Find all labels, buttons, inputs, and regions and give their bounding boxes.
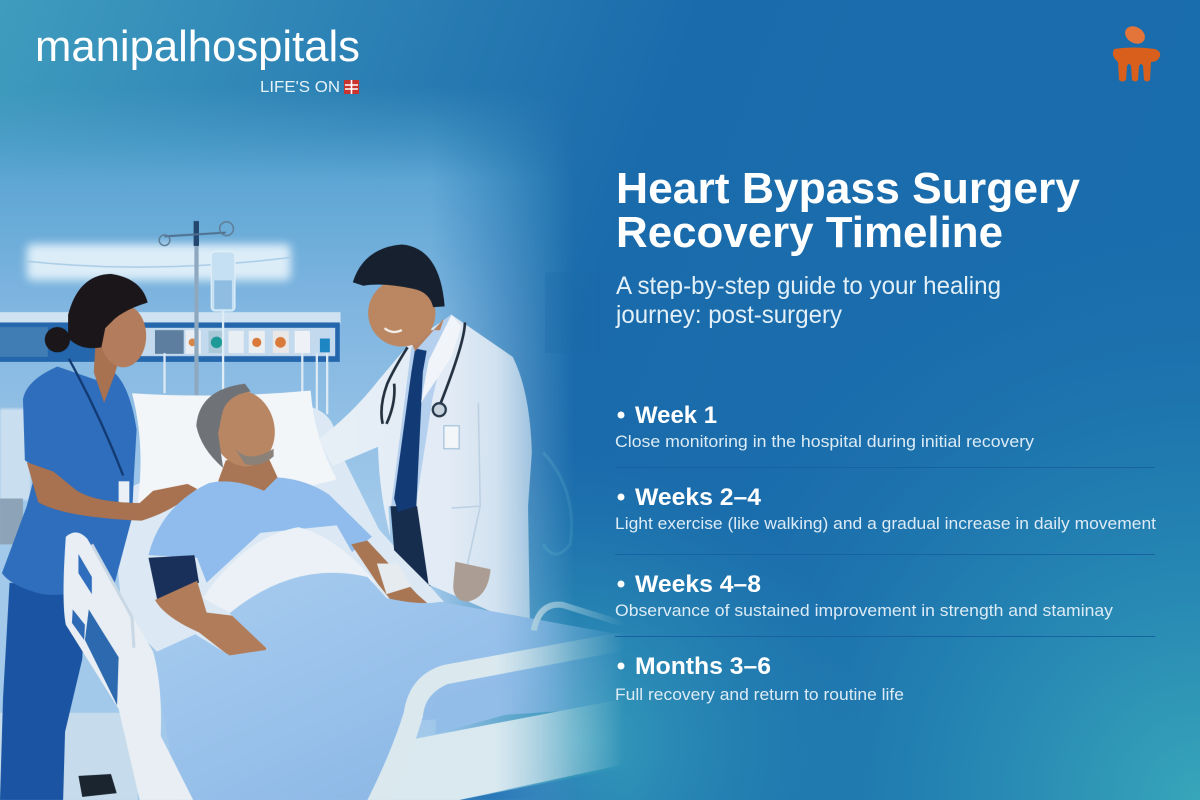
ceiling light (27, 244, 291, 280)
subtitle (615, 272, 1001, 329)
arm (155, 581, 268, 656)
timeline item: week 1: Close monitoring in the hospital during initial recovery (615, 432, 1035, 451)
timeline item: months 3-6: Full recovery and return to routine life (615, 685, 904, 704)
shirt (391, 314, 452, 506)
bun (45, 327, 70, 352)
hand (453, 562, 491, 602)
neck (412, 318, 444, 352)
trousers (390, 500, 430, 586)
lanyard (69, 359, 123, 476)
id badge (444, 426, 459, 449)
title: Recovery Timeline (616, 208, 1003, 257)
scrub top (2, 366, 137, 595)
doctor (318, 244, 532, 629)
icon: orange brand mark (1113, 23, 1160, 82)
faint equipment right (542, 452, 573, 556)
timeline item: week 1 (615, 402, 1035, 451)
timeline item: weeks 2-4: Weeks 2–4 (635, 484, 762, 511)
pillow (132, 391, 337, 506)
smile (385, 328, 402, 332)
face (368, 279, 435, 347)
bp cuff (148, 555, 199, 602)
iv bandage (377, 564, 411, 594)
title: Heart Bypass Surgery (616, 164, 1081, 213)
white coat (318, 315, 532, 629)
id badge (119, 481, 129, 503)
bed wheel (78, 774, 117, 797)
face (218, 392, 276, 466)
timeline item: weeks 4-8: Weeks 4–8 (635, 571, 761, 598)
tagline: LIFE'S ON (260, 79, 340, 96)
trousers (0, 583, 85, 800)
left bed rail (64, 532, 193, 800)
left bedside surface (0, 409, 138, 800)
arm (27, 462, 197, 521)
patient (148, 384, 429, 656)
subtitle: journey: post-surgery (615, 301, 842, 329)
hair (353, 244, 445, 307)
white blanket fold (203, 527, 376, 612)
hospital gown (148, 477, 372, 583)
nurse (0, 274, 197, 800)
blue blanket (153, 573, 651, 800)
hair (68, 274, 148, 348)
timeline item: weeks 4-8 (615, 571, 1114, 620)
title (616, 164, 1081, 257)
timeline item: weeks 2-4: Light exercise (like walking) and a gradual increase in daily movement (615, 514, 1156, 533)
timeline item: week 1: Week 1 (635, 402, 717, 429)
face (100, 304, 146, 367)
timeline item: weeks 2-4 (615, 484, 1156, 533)
timeline item: months 3-6: Months 3–6 (635, 653, 771, 680)
wall gas panel (0, 312, 341, 414)
tie (394, 348, 427, 512)
subtitle: A step-by-step guide to your healing (616, 272, 1001, 300)
stethoscope (381, 322, 465, 424)
coat seam (452, 403, 480, 567)
hair (196, 384, 251, 468)
right bed rail (367, 605, 651, 800)
mattress (118, 407, 444, 717)
neck (94, 346, 118, 403)
logo: manipalhospitals (35, 22, 360, 96)
IV pole and bag (159, 221, 235, 395)
timeline item: months 3-6 (615, 653, 904, 704)
lapel (421, 315, 461, 403)
room wall (0, 85, 600, 800)
neck (218, 459, 278, 491)
beard (235, 449, 274, 465)
timeline item: weeks 4-8: Observance of sustained improvement in strength and staminay (615, 601, 1114, 620)
wordmark: manipalhospitals (35, 22, 360, 71)
icon: red plus badge (344, 80, 359, 94)
right arm (351, 541, 429, 605)
hospital room photo illustration (0, 221, 651, 800)
